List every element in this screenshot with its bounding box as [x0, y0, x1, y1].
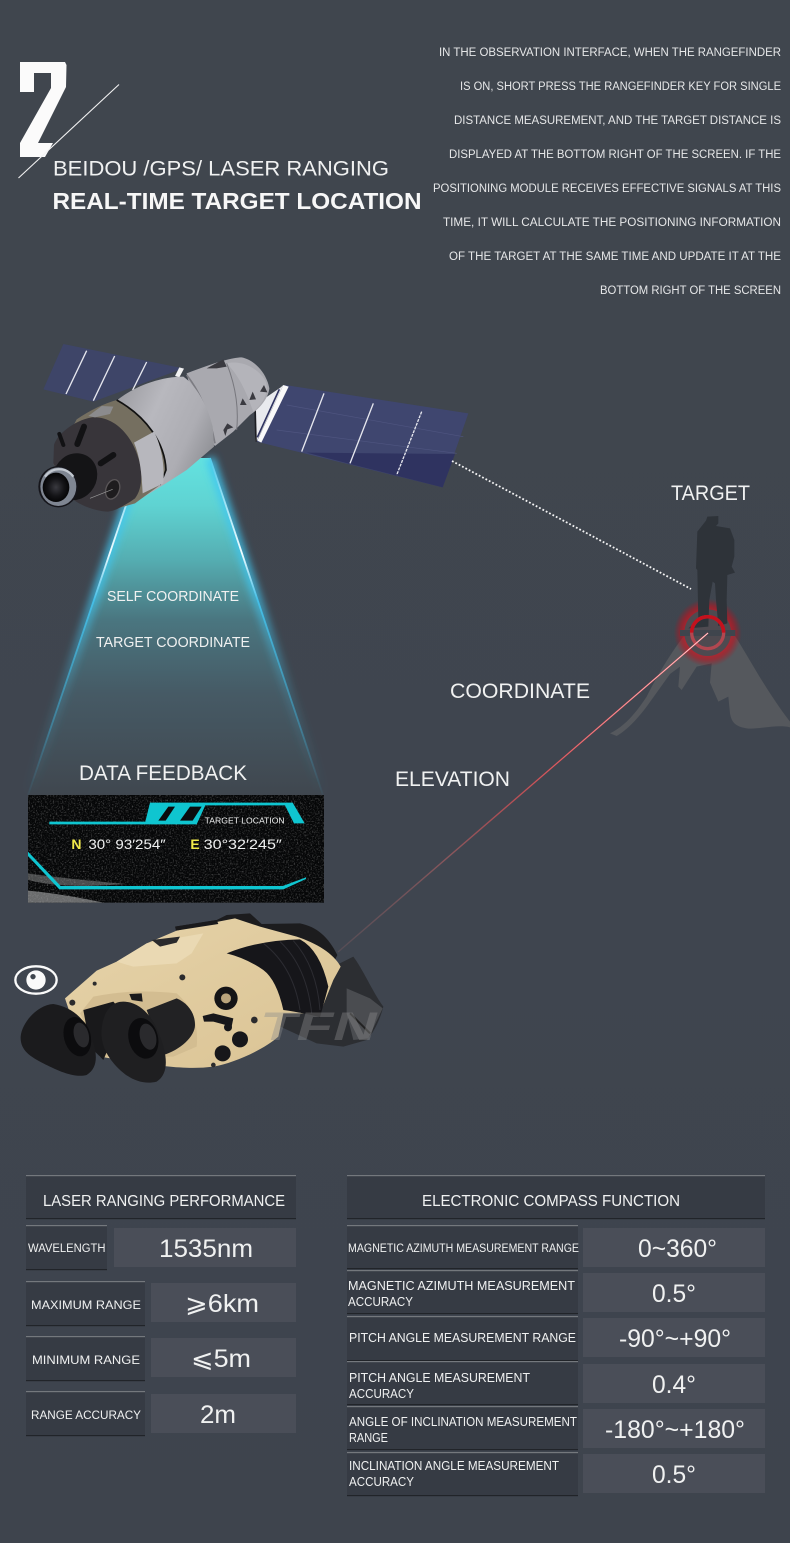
main hull — [117, 377, 214, 503]
row: pitch angle measurement accuracy: ACCURACY — [349, 1387, 415, 1401]
row: inclination angle measurement accuracy — [347, 1452, 765, 1496]
panel: laser ranging performance — [26, 1175, 296, 1436]
row: minimum range: MINIMUM RANGE — [32, 1353, 140, 1367]
ocular recess — [80, 991, 197, 1057]
top hood — [175, 913, 337, 963]
description paragraph — [433, 47, 781, 297]
row: magnetic azimuth measurement accuracy: 0.5° — [652, 1280, 696, 1308]
row: angle of inclination measurement range — [347, 1406, 765, 1450]
description paragraph: POSITIONING MODULE RECEIVES EFFECTIVE SIGNALS AT THIS — [433, 183, 781, 195]
dark nose — [53, 417, 141, 512]
row: inclination angle measurement accuracy: ACCURACY — [349, 1475, 415, 1489]
row: maximum range: MAXIMUM RANGE — [31, 1298, 141, 1312]
row: maximum range — [26, 1281, 296, 1326]
row: angle of inclination measurement range: RANGE — [349, 1431, 388, 1445]
description paragraph: IN THE OBSERVATION INTERFACE, WHEN THE RANGEFINDER — [439, 47, 781, 59]
row: range accuracy: 2m — [200, 1401, 236, 1429]
description paragraph: DISTANCE MEASUREMENT, AND THE TARGET DISTANCE IS — [454, 115, 781, 127]
label: target coordinate: TARGET COORDINATE — [96, 635, 250, 651]
camera lens — [38, 445, 106, 508]
header: ELECTRONIC COMPASS FUNCTION — [422, 1193, 680, 1210]
right solar panel — [255, 385, 468, 487]
row: pitch angle measurement range: PITCH ANGLE MEASUREMENT RANGE — [349, 1331, 576, 1345]
rubber armor — [227, 939, 328, 1017]
row: range accuracy — [26, 1391, 296, 1436]
left solar panel — [43, 344, 184, 402]
signal beam — [28, 458, 323, 795]
label: data feedback: DATA FEEDBACK — [79, 762, 247, 785]
description paragraph: OF THE TARGET AT THE SAME TIME AND UPDATE IT AT THE — [449, 251, 781, 263]
heading — [52, 158, 422, 214]
data feedback display: 30°32′245″ — [204, 836, 282, 852]
row: magnetic azimuth measurement accuracy — [347, 1270, 765, 1314]
reticle disc — [684, 609, 731, 656]
satellite — [38, 344, 468, 512]
section number 2 with slash — [18, 62, 119, 178]
header — [26, 1175, 296, 1219]
row: pitch angle measurement accuracy — [347, 1361, 765, 1405]
controls — [69, 974, 258, 1067]
description paragraph: IS ON, SHORT PRESS THE RANGEFINDER KEY FOR SINGLE — [460, 81, 781, 93]
head strap — [277, 957, 383, 1047]
heading: BEIDOU /GPS/ LASER RANGING — [53, 158, 389, 180]
man silhouette — [688, 516, 735, 628]
label: elevation: ELEVATION — [395, 768, 510, 791]
description paragraph: DISPLAYED AT THE BOTTOM RIGHT OF THE SCREEN. IF THE — [449, 149, 781, 161]
row: minimum range: ⩽5m — [191, 1345, 251, 1373]
header: LASER RANGING PERFORMANCE — [43, 1193, 285, 1210]
target figure on mountain with reticle — [610, 516, 790, 736]
row: inclination angle measurement accuracy: INCLINATION ANGLE MEASUREMENT — [349, 1459, 559, 1473]
header — [347, 1175, 765, 1219]
row: magnetic azimuth measurement accuracy: ACCURACY — [348, 1295, 414, 1309]
row: pitch angle measurement accuracy: 0.4° — [652, 1371, 696, 1399]
hull plate — [134, 432, 164, 493]
row: pitch angle measurement range: -90°~+90° — [619, 1325, 731, 1353]
row: wavelength: 1535nm — [159, 1235, 253, 1263]
row: magnetic azimuth measurement range: 0~360° — [638, 1235, 717, 1263]
reticle rings — [680, 617, 735, 649]
row: range accuracy: RANGE ACCURACY — [31, 1408, 141, 1422]
description paragraph: TIME, IT WILL CALCULATE THE POSITIONING INFORMATION — [443, 217, 781, 229]
reticle glow — [674, 599, 742, 667]
heading: REAL-TIME TARGET LOCATION — [52, 188, 422, 214]
data feedback display: E — [190, 836, 200, 852]
row: minimum range — [26, 1336, 296, 1381]
tan housing — [65, 918, 341, 1068]
dotted line: satellite to target — [452, 461, 691, 589]
data feedback display: 30° 93′254″ — [88, 836, 166, 852]
row: wavelength — [26, 1225, 296, 1270]
row: magnetic azimuth measurement accuracy: MAGNETIC AZIMUTH MEASUREMENT — [348, 1279, 575, 1293]
row: magnetic azimuth measurement range — [347, 1225, 765, 1269]
row: wavelength: WAVELENGTH — [28, 1243, 106, 1255]
row: angle of inclination measurement range: -180°~+180° — [605, 1416, 745, 1444]
description paragraph: BOTTOM RIGHT OF THE SCREEN — [600, 285, 781, 297]
left eyecup — [21, 1004, 96, 1076]
data feedback display — [28, 795, 324, 903]
barrels — [83, 1002, 123, 1060]
row: angle of inclination measurement range: ANGLE OF INCLINATION MEASUREMENT — [349, 1415, 577, 1429]
label: target: TARGET — [671, 482, 750, 505]
watermark: TFN — [260, 1005, 378, 1049]
data feedback display: N — [71, 836, 81, 852]
thermal binoculars — [21, 913, 383, 1083]
row: maximum range: ⩾6km — [185, 1290, 259, 1318]
label: self coordinate: SELF COORDINATE — [107, 589, 239, 605]
rear module — [187, 357, 269, 446]
panel: electronic compass function — [347, 1175, 765, 1496]
row: pitch angle measurement accuracy: PITCH ANGLE MEASUREMENT — [349, 1371, 530, 1385]
row: inclination angle measurement accuracy: 0.5° — [652, 1461, 696, 1489]
mountain — [610, 633, 790, 736]
label: coordinate: COORDINATE — [450, 680, 590, 703]
row: pitch angle measurement range — [347, 1316, 765, 1361]
nose ring — [53, 400, 166, 512]
cyan frame — [28, 803, 306, 889]
data feedback display: TARGET LOCATION — [205, 815, 285, 825]
row: magnetic azimuth measurement range: MAGNETIC AZIMUTH MEASUREMENT RANGE — [348, 1243, 579, 1255]
right eyecup — [101, 1002, 166, 1083]
icon: eye — [15, 966, 57, 994]
laser beam — [338, 633, 708, 952]
